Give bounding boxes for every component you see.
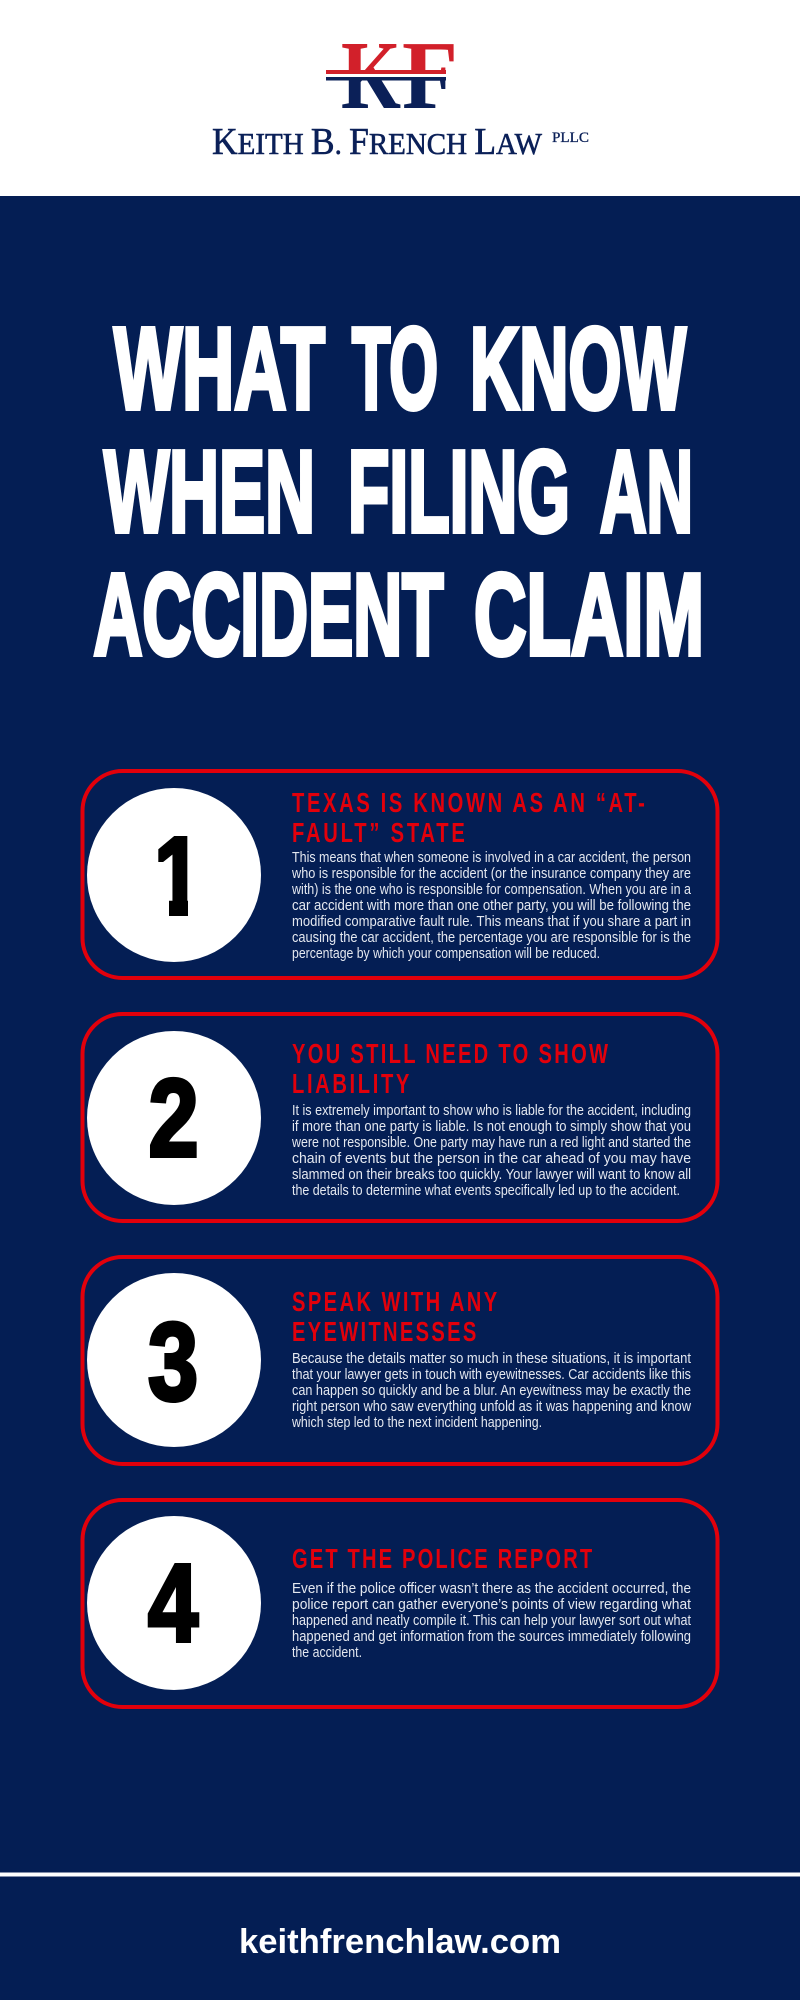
body text	[291, 1102, 691, 1199]
panel: step 4	[82, 1500, 718, 1707]
number circle 2: 2	[148, 1058, 199, 1180]
body text: which step led to the next incident happening.	[291, 1414, 542, 1431]
body text: happened and neatly compile it. This can help your lawyer sort out what	[292, 1612, 692, 1629]
body text: chain of events but the person in the car ahead of you may have	[292, 1150, 691, 1167]
header band with logo	[0, 0, 800, 196]
heading: SPEAK WITH ANY	[292, 1287, 497, 1318]
body text: causing the car accident, the percentage you are responsible for is the	[292, 929, 691, 946]
heading: EYEWITNESSES	[292, 1317, 476, 1348]
panel: step 1	[82, 771, 718, 978]
number circle 1	[87, 788, 261, 962]
heading: LIABILITY	[292, 1069, 409, 1100]
panel: step 3	[82, 1257, 718, 1464]
title: AN	[600, 426, 693, 556]
body text: with) is the one who is responsible for compensation. When you are in a	[291, 881, 692, 898]
panel: step 2	[82, 1014, 718, 1221]
body text: percentage by which your compensation will be reduced.	[292, 945, 600, 962]
logo PLLC suffix: PLLC	[552, 130, 589, 146]
body text: car accident with more than one other party, you will be following the	[292, 897, 691, 914]
heading: GET THE POLICE REPORT	[292, 1544, 592, 1575]
body text: were not responsible. One party may have run a red light and started the	[291, 1134, 691, 1151]
body text	[291, 849, 692, 962]
body text: the details to determine what events specifically led up to the accident.	[292, 1182, 680, 1199]
heading	[292, 788, 645, 849]
title: ACCIDENT	[94, 550, 444, 680]
body text: This means that when someone is involved in a car accident, the person	[292, 849, 691, 866]
body text: slammed on their breaks too quickly. Your lawyer will want to know all	[292, 1166, 691, 1183]
body text: who is responsible for the accident (or the insurance company they are	[291, 865, 691, 882]
body text: It is extremely important to show who is liable for the accident, including	[292, 1102, 691, 1119]
title	[94, 304, 704, 680]
heading: TEXAS IS KNOWN AS AN “AT-	[292, 788, 645, 819]
heading	[292, 1287, 497, 1348]
body text: police report can gather everyone’s points of view regarding what	[292, 1596, 692, 1613]
heading	[292, 1039, 608, 1100]
title: FILING	[348, 426, 570, 556]
logo mark: KF monogram	[326, 44, 454, 108]
title: TO	[352, 304, 438, 434]
number circle 4: 4	[148, 1543, 198, 1665]
logo mark: KF monogram: K	[341, 22, 401, 129]
number circle 2	[87, 1031, 261, 1205]
logo wordmark: KEITH B. FRENCH LAW	[212, 121, 543, 163]
body text: right person who saw everything unfold as it was happening and know	[292, 1398, 691, 1415]
title: WHAT	[114, 304, 325, 434]
title: WHEN	[104, 426, 315, 556]
body text	[291, 1350, 692, 1431]
body text: if more than one party is liable. Is not enough to simply show that you	[292, 1118, 691, 1135]
logo mark: KF monogram: F	[402, 22, 458, 129]
number circle 4	[87, 1516, 261, 1690]
body text: modified comparative fault rule. This means that if you share a part in	[292, 913, 691, 930]
number circle 1: 1	[154, 815, 202, 937]
body text: happened and get information from the sources immediately following	[292, 1628, 691, 1645]
number circle 3	[87, 1273, 261, 1447]
body text: can happen so quickly and be a blur. An eyewitness may be exactly the	[292, 1382, 691, 1399]
heading: FAULT” STATE	[292, 818, 465, 849]
footer website: keithfrenchlaw.com	[239, 1923, 561, 1961]
body text: Because the details matter so much in these situations, it is important	[292, 1350, 692, 1367]
body text: the accident.	[292, 1644, 362, 1661]
body text: that your lawyer gets in touch with eyewitnesses. Car accidents like this	[292, 1366, 691, 1383]
number circle 3: 3	[148, 1302, 198, 1424]
logo mark: KF monogram: K	[341, 22, 401, 129]
heading: YOU STILL NEED TO SHOW	[292, 1039, 608, 1070]
body text: Even if the police officer wasn’t there as the accident occurred, the	[292, 1580, 691, 1597]
logo mark: KF monogram: F	[402, 22, 458, 129]
body text	[292, 1580, 692, 1661]
